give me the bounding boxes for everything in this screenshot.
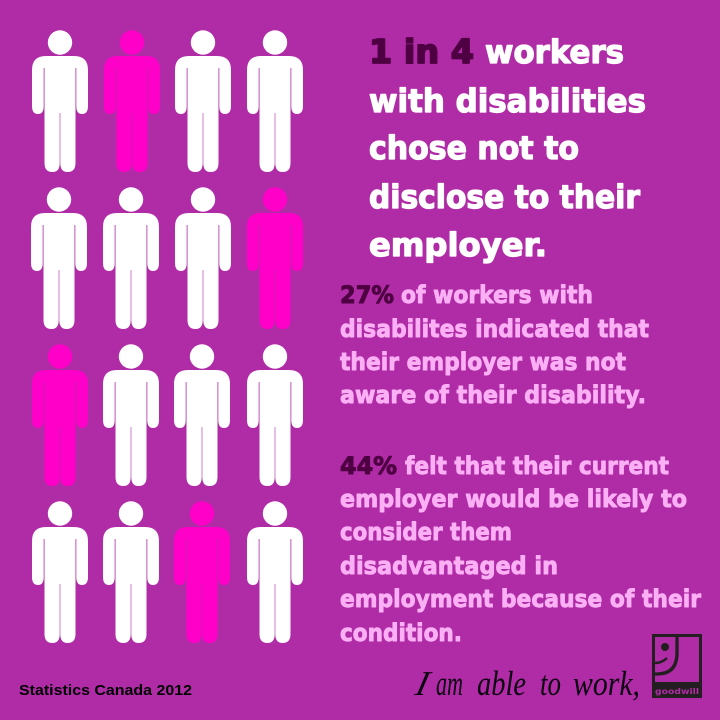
person row 1 col 3 [175,30,231,172]
text block: 27% statistic: disabilites indicated that [340,315,649,343]
person row 1 col 1 [32,30,88,172]
tagline: to [540,664,561,703]
text block: 27% statistic: their employer was not [340,348,626,376]
person row 2 col 1 [31,187,87,329]
tagline: able [477,664,526,703]
tagline: I [411,663,436,703]
text block: 44% statistic: employer would be likely to [340,485,687,513]
icon: goodwill logo: goodwill [655,687,699,696]
icon: goodwill logo [652,634,702,698]
person row 2 col 2 [103,187,159,329]
pictogram: 16 people, 4 highlighted [31,30,303,643]
text block: 27% statistic: 27% [340,281,394,309]
person row 3 col 1 highlighted [32,344,88,486]
headline: employer. [369,226,547,264]
text block: 44% statistic: felt that their current [405,452,669,480]
text block: 44% statistic: disadvantaged in [340,552,558,580]
tagline: am [436,664,463,703]
text block: 27% statistic: aware of their disability. [340,381,646,409]
person row 4 col 4 [247,501,303,643]
person row 2 col 4 highlighted [247,187,303,329]
person row 4 col 3 highlighted [174,501,230,643]
headline: workers [485,33,624,71]
tagline: work, [573,664,640,703]
person row 1 col 4 [247,30,303,172]
text block: 44% statistic [340,452,701,647]
person row 3 col 2 [103,344,159,486]
text block: 44% statistic: 44% [340,452,397,480]
person row 3 col 4 [247,344,303,486]
headline: chose not to [369,129,579,167]
person row 1 col 2 highlighted [104,30,160,172]
person row 3 col 3 [174,344,230,486]
tagline [411,663,640,703]
person row 2 col 3 [175,187,231,329]
text block: 44% statistic: condition. [340,619,462,647]
person row 4 col 2 [103,501,159,643]
headline: disclose to their [369,178,640,216]
headline: with disabilities [369,82,646,120]
headline: 1 in 4 [369,32,474,71]
source: Statistics Canada 2012 [19,682,192,699]
text block: 27% statistic: of workers with [401,281,593,309]
headline [369,32,646,264]
text block: 27% statistic [340,281,649,409]
text block: 44% statistic: consider them [340,518,512,546]
person row 4 col 1 [32,501,88,643]
